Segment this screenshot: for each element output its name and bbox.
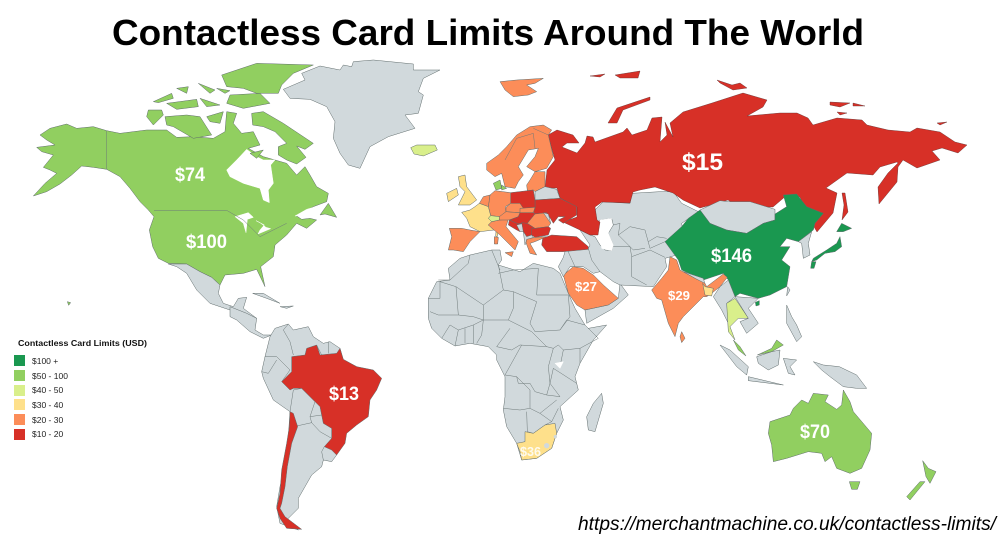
Africa [428, 250, 607, 460]
Mongolia [700, 201, 775, 233]
Scandinavia [487, 125, 553, 188]
Korea [798, 232, 812, 258]
label Canada: $74 [175, 165, 205, 186]
Canadian islands [320, 203, 337, 217]
Svalbard [500, 78, 543, 97]
label China: $146 [711, 246, 752, 267]
Benelux [479, 195, 490, 207]
Moldova [543, 213, 551, 223]
legend title: Contactless Card Limits (USD) [18, 338, 147, 348]
New Guinea [813, 362, 867, 388]
legend item $100 +: $100 + [32, 356, 58, 366]
Spain and Portugal [448, 228, 480, 252]
Hungary [509, 213, 535, 223]
map: South America [230, 307, 382, 530]
title: Contactless Card Limits Around The World [112, 12, 864, 53]
Ukraine [533, 198, 577, 223]
map: Russia [545, 71, 967, 235]
African borders [428, 250, 598, 433]
Poland [511, 190, 535, 208]
France [462, 203, 494, 232]
Greece [526, 237, 547, 255]
Baltic states [527, 172, 545, 192]
China [665, 194, 823, 298]
Belarus [535, 187, 560, 200]
Slovakia [520, 207, 535, 213]
Thailand [727, 298, 748, 340]
Croatia [508, 220, 523, 232]
label Saudi Arabia: $27 [575, 279, 597, 294]
label India: $29 [668, 288, 690, 303]
Italy [488, 219, 518, 250]
Turkey [542, 235, 588, 252]
label South Africa: $36 [520, 444, 541, 459]
legend item $30 - 40: $30 - 40 [32, 400, 63, 410]
map: North America [33, 63, 337, 320]
Novaya Zemlya [608, 97, 650, 123]
label Russia: $15 [682, 149, 723, 176]
legend item $40 - 50: $40 - 50 [32, 385, 63, 395]
Mexico [168, 264, 257, 320]
South Africa [517, 423, 557, 460]
Caribbean islands [253, 293, 280, 303]
Malaysia [733, 340, 746, 356]
Saudi Arabia [563, 267, 618, 310]
Tasmania [849, 482, 860, 489]
Iceland [411, 145, 437, 156]
Corsica [496, 232, 498, 237]
map: Europe [447, 78, 588, 257]
legend item $10 - 20: $10 - 20 [32, 429, 63, 439]
Japan [811, 223, 852, 268]
Swaziland [554, 435, 557, 438]
Germany [488, 191, 511, 217]
Serbia [522, 223, 535, 237]
Hainan [755, 301, 759, 306]
map: Greenland [283, 60, 440, 168]
Java [748, 377, 783, 385]
legend item $50 - 100: $50 - 100 [32, 371, 68, 381]
Taiwan [787, 287, 790, 296]
Madagascar [587, 393, 603, 432]
Bangladesh [703, 283, 713, 296]
Philippines [787, 305, 802, 342]
continent outline [262, 324, 357, 530]
Arctic islands [717, 80, 747, 90]
Australia [768, 390, 872, 473]
Sri Lanka [680, 332, 685, 343]
source URL: https://merchantmachine.co.uk/contactless-limits/ [578, 514, 998, 535]
Chile [277, 412, 302, 529]
map: Oceania [768, 390, 936, 500]
Sulawesi [783, 358, 797, 375]
Czech Republic [506, 203, 523, 213]
Romania [527, 213, 551, 228]
Sakhalin [842, 193, 848, 220]
Brazil [282, 345, 382, 455]
label USA: $100 [186, 232, 227, 253]
Lesotho [544, 443, 549, 448]
legend item $20 - 30: $20 - 30 [32, 415, 63, 425]
Switzerland [488, 216, 500, 222]
Laos and Vietnam [735, 297, 758, 333]
map: Middle East and Central Asia [558, 192, 698, 287]
Borneo [757, 350, 780, 370]
Yemen and Oman [585, 283, 628, 323]
Austria [499, 212, 520, 220]
Sumatra [720, 345, 748, 375]
map: East and South Asia [652, 194, 867, 388]
Denmark [493, 180, 502, 190]
New Zealand [907, 461, 936, 500]
legend [14, 338, 147, 440]
Myanmar [713, 280, 735, 327]
label Australia: $70 [800, 422, 830, 443]
Albania and Macedonia [523, 232, 533, 245]
Ireland [447, 188, 458, 202]
map: Africa and Arabia [428, 250, 628, 460]
United Kingdom [458, 175, 477, 205]
India [652, 257, 727, 337]
Canada, USA and Alaska [33, 112, 328, 287]
Bosnia [517, 223, 523, 232]
Hudson Bay and lakes [227, 149, 275, 203]
Bulgaria [532, 227, 551, 237]
Nepal [683, 272, 705, 284]
value labels [175, 149, 830, 459]
Central America [230, 307, 272, 338]
label Brazil: $13 [329, 384, 359, 405]
